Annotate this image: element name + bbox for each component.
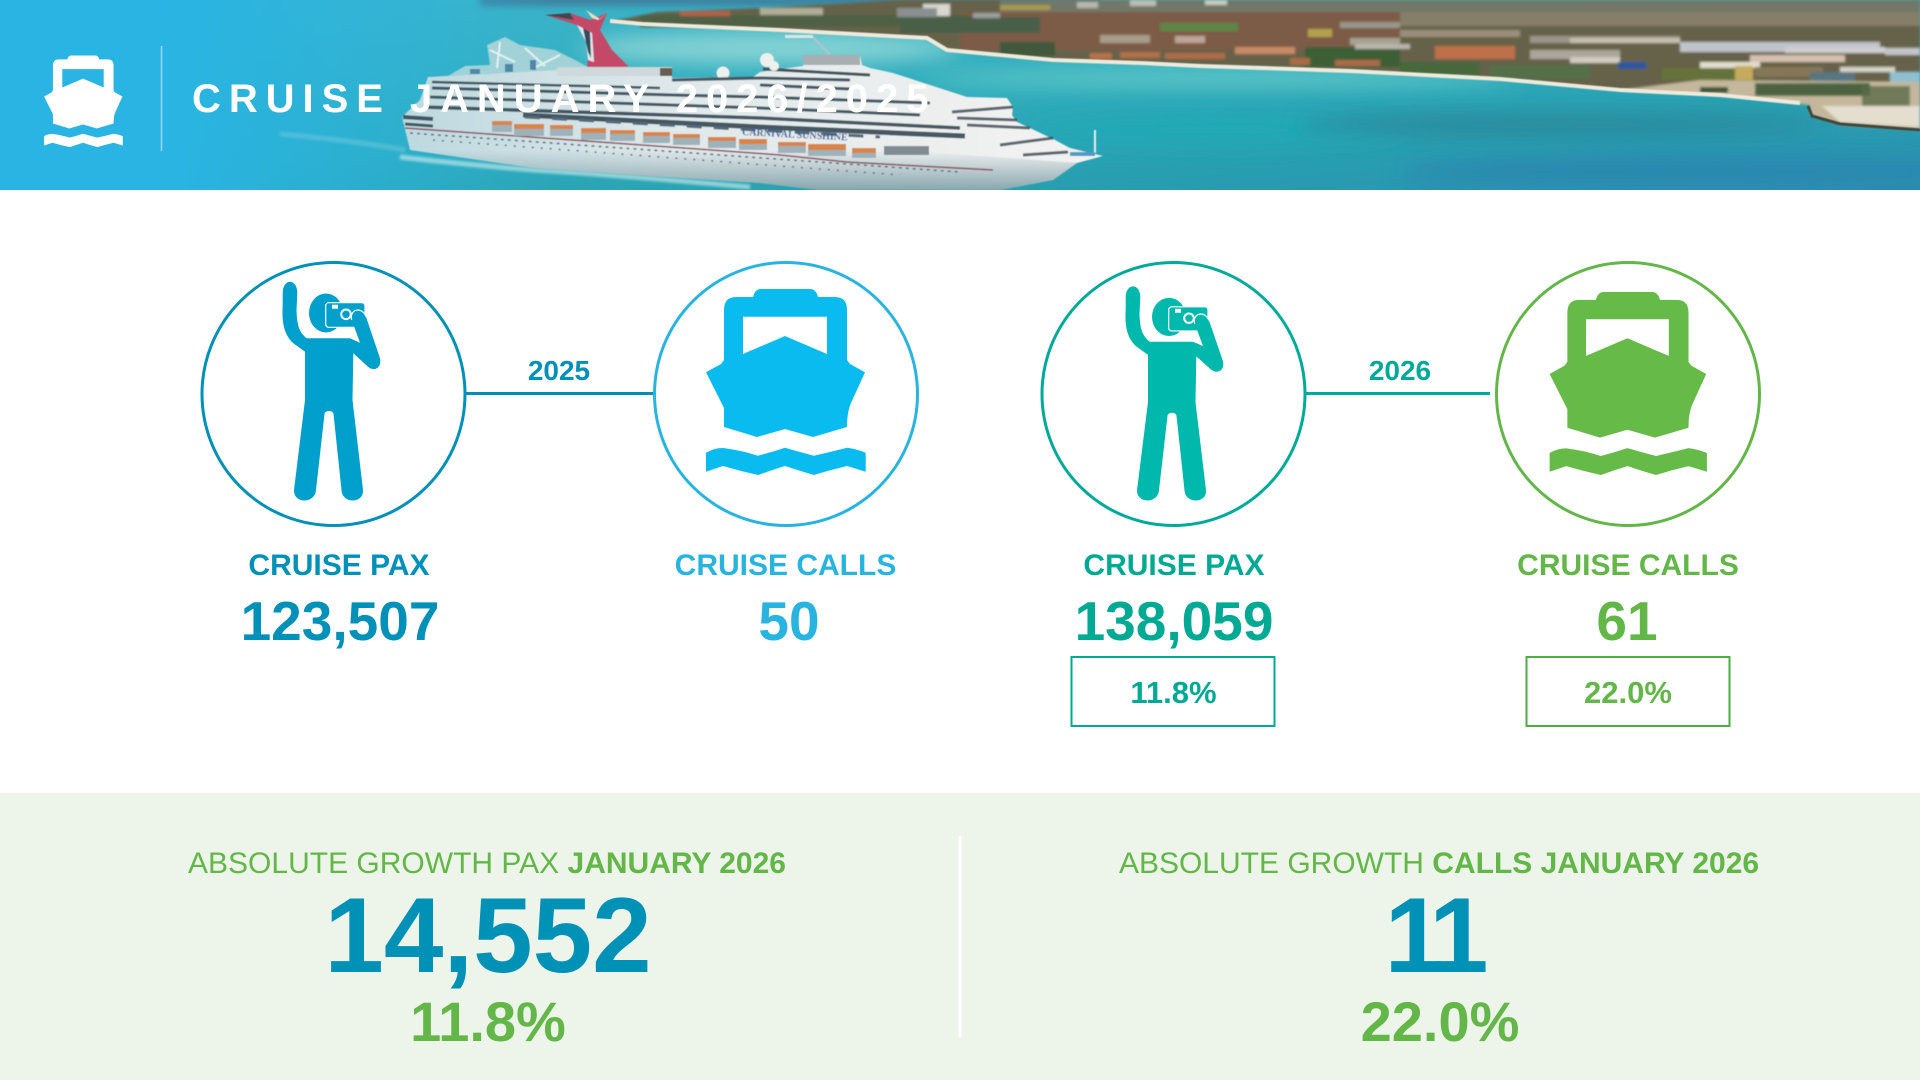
funnel: [545, 13, 630, 68]
stat: absolute growth pax: ABSOLUTE GROWTH PAX JANUARY 2026: [188, 847, 786, 880]
title: CRUISE JANUARY 2026/2025: [192, 77, 936, 121]
stat: cruise pax 2026: [1075, 549, 1273, 652]
left fade overlay: [0, 0, 511, 190]
stat: absolute growth calls: ABSOLUTE GROWTH CALLS JANUARY 2026: [1119, 847, 1759, 880]
change box: calls 22.0%: 22.0%: [1584, 675, 1672, 710]
stat: cruise pax 2026: CRUISE PAX: [1083, 549, 1265, 582]
year label 2026: 2026: [1369, 355, 1431, 386]
circle icon: cruise ship 2026: [1496, 262, 1760, 526]
cruise ship: [402, 10, 1103, 190]
stat: cruise calls 2025: [675, 549, 896, 652]
header banner: [0, 0, 1920, 190]
stat: absolute growth pax: 11.8%: [410, 990, 566, 1053]
stat: cruise calls 2026: 61: [1596, 590, 1658, 652]
header divider: [160, 46, 162, 151]
circle icon: cruise passenger 2025: [202, 262, 465, 526]
windows row: [525, 117, 880, 137]
icon: white ship: [44, 55, 123, 147]
shoreline beach: [610, 21, 1800, 103]
deck stripes: [403, 78, 965, 136]
stat: cruise pax 2025: CRUISE PAX: [248, 549, 430, 582]
year label 2025: 2025: [528, 355, 590, 386]
superstructure and hull: [402, 55, 1103, 190]
water park: [448, 37, 590, 76]
panel: 2025 figures: [202, 262, 918, 652]
circle icon: cruise passenger 2026: [1042, 262, 1305, 526]
stat: cruise calls 2025: 50: [758, 590, 820, 652]
lifeboats: [492, 124, 876, 158]
stat: cruise pax 2025: 123,507: [241, 590, 439, 652]
change box: pax 11.8%: 11.8%: [1130, 675, 1217, 710]
change box: pax 11.8%: [1072, 657, 1274, 726]
stat: cruise pax 2025: [241, 549, 439, 652]
ship name: CARNIVAL SUNSHINE: [742, 127, 848, 144]
stat: absolute growth calls: [1119, 847, 1759, 1053]
bow balconies: [952, 107, 1068, 155]
stat: absolute growth pax: 14,552: [324, 875, 652, 995]
stat: absolute growth calls: 22.0%: [1361, 990, 1519, 1053]
connector line 2026: [1305, 392, 1490, 395]
hull stripe: [405, 128, 993, 170]
stat: cruise pax 2026: 138,059: [1075, 590, 1273, 652]
ship wake: [280, 134, 750, 187]
change box: calls 22.0%: [1526, 657, 1730, 726]
connector line 2025: [465, 392, 654, 395]
stat: cruise calls 2025: CRUISE CALLS: [675, 549, 896, 582]
stat: absolute growth pax: [188, 847, 786, 1053]
panel: absolute growth: [0, 793, 1920, 1080]
stat: cruise calls 2026: [1517, 549, 1739, 652]
divider: [958, 836, 962, 1037]
photo: aerial harbour view with cruise ship: [0, 0, 1920, 190]
circle icon: cruise ship 2025: [654, 262, 918, 526]
stat: cruise calls 2026: CRUISE CALLS: [1517, 549, 1739, 582]
stat: absolute growth calls: 11: [1384, 875, 1486, 995]
panel: 2026 figures: [1042, 262, 1760, 726]
